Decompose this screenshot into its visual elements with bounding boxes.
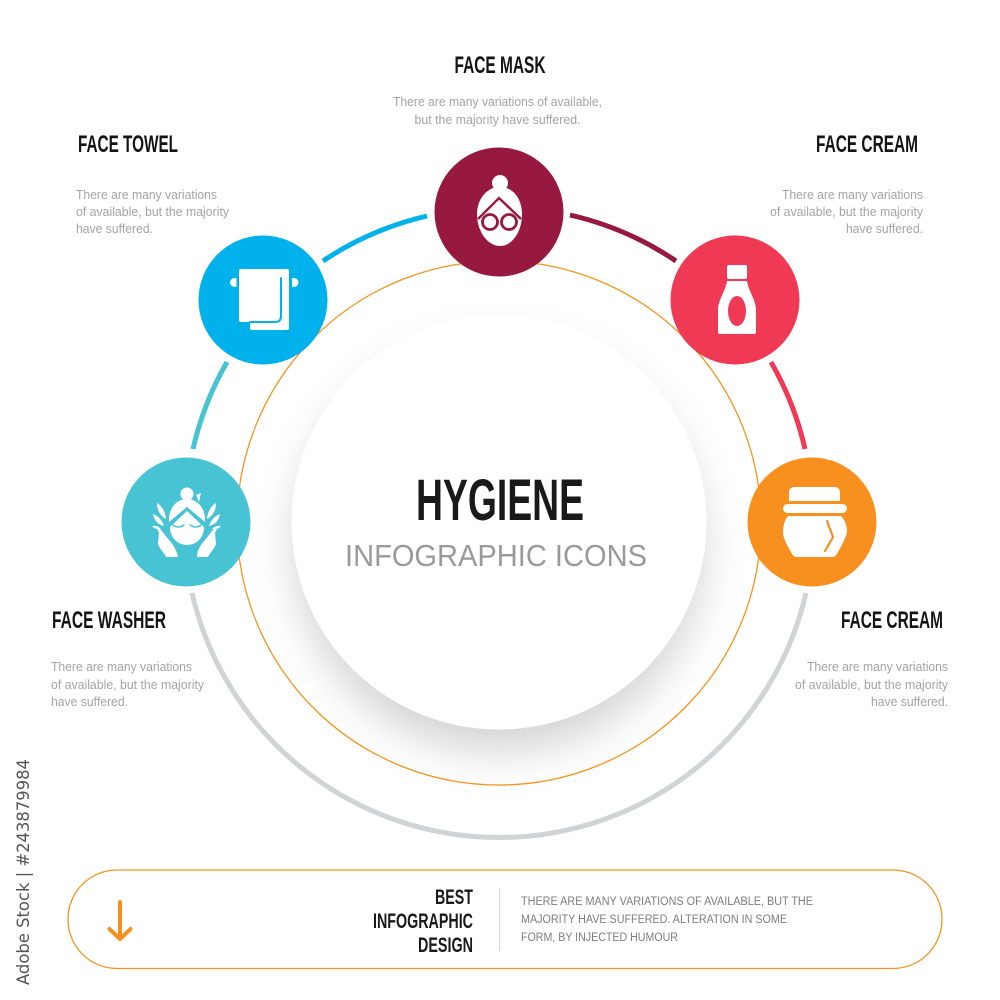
label: face towel: of available, but the majority — [76, 205, 230, 219]
banner heading: BEST — [435, 886, 473, 909]
outer ring arcs — [192, 215, 806, 837]
label: face washer: FACE WASHER — [52, 607, 166, 634]
banner body text: THERE ARE MANY VARIATIONS OF AVAILABLE, BUT THE — [521, 896, 813, 908]
stock credit: Adobe Stock | #243879984 — [14, 759, 33, 985]
label: face washer: of available, but the majority — [51, 678, 205, 692]
label: face towel: have suffered. — [76, 222, 153, 236]
label: face mask — [393, 52, 602, 127]
banner body text — [521, 896, 813, 944]
center title — [345, 468, 647, 573]
icon: down arrow — [110, 902, 130, 939]
arc: red — [771, 362, 805, 449]
node: face cream jar — [748, 458, 876, 586]
banner heading: INFOGRAPHIC — [373, 910, 473, 933]
label: face cream top: FACE CREAM — [816, 131, 918, 158]
icon: bottle — [718, 265, 756, 334]
banner heading: DESIGN — [418, 934, 473, 957]
label: face washer: have suffered. — [51, 695, 128, 709]
label: face towel: FACE TOWEL — [78, 131, 178, 158]
node: face washer — [122, 458, 250, 586]
center title: INFOGRAPHIC ICONS — [345, 538, 647, 573]
node: face towel — [198, 236, 328, 364]
label: face cream bottom: of available, but the majority — [795, 678, 949, 692]
center white disc — [292, 314, 706, 730]
label: face mask: but the majority have suffered. — [414, 113, 580, 127]
label: face cream bottom — [795, 607, 949, 709]
arc: maroon — [570, 215, 676, 261]
center title: HYGIENE — [416, 468, 584, 533]
banner body text: FORM, BY INJECTED HUMOUR — [521, 932, 678, 944]
label: face towel — [76, 131, 230, 236]
label: face cream top: of available, but the majority — [770, 205, 924, 219]
bottom banner — [68, 870, 942, 968]
label: face towel: There are many variations — [76, 188, 217, 202]
label: face cream top: have suffered. — [846, 222, 923, 236]
icon: jar — [783, 487, 847, 557]
label: face washer — [51, 607, 205, 709]
label: face mask: FACE MASK — [454, 52, 546, 79]
node: face mask — [434, 148, 564, 276]
arc: blue — [323, 216, 427, 261]
label: face cream bottom: There are many variations — [807, 660, 948, 674]
label: face washer: There are many variations — [51, 660, 192, 674]
arc: gray bottom — [192, 593, 806, 837]
orange inner ring — [237, 261, 761, 785]
label: face cream bottom: have suffered. — [871, 695, 948, 709]
banner body text: MAJORITY HAVE SUFFERED. ALTERATION IN SOME — [521, 914, 787, 926]
arc: teal — [193, 362, 227, 449]
label: face cream top: There are many variations — [782, 188, 923, 202]
node: face cream bottle — [670, 236, 800, 364]
icon: face washer — [152, 488, 221, 557]
label: face mask: There are many variations of available, — [393, 95, 602, 109]
icon: towel — [230, 269, 298, 330]
icon: face mask — [477, 175, 522, 246]
center shadow — [294, 342, 704, 752]
banner heading — [373, 886, 473, 957]
label: face cream bottom: FACE CREAM — [841, 607, 943, 634]
label: face cream top — [770, 131, 924, 236]
